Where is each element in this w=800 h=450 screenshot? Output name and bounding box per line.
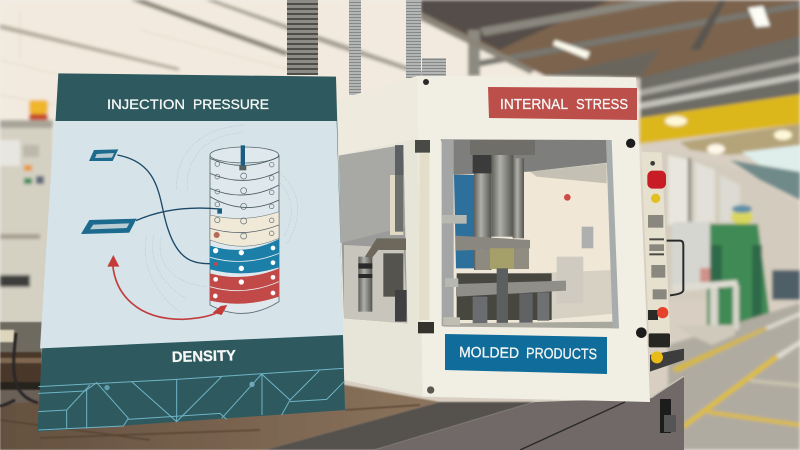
wall pipes xyxy=(0,24,180,71)
control strip xyxy=(641,152,671,347)
lights xyxy=(748,6,770,27)
cream layers xyxy=(210,212,279,246)
skylight xyxy=(742,145,800,172)
table xyxy=(672,280,738,292)
side window xyxy=(339,145,407,323)
wood table surface xyxy=(0,333,535,450)
wall column xyxy=(468,30,480,76)
hinges and bolts xyxy=(415,140,430,153)
left bench under control box xyxy=(0,322,42,405)
upper plate xyxy=(455,236,530,251)
grey cabinet xyxy=(672,222,710,288)
far wall xyxy=(664,150,800,300)
layer dots xyxy=(215,162,274,239)
sensor icons xyxy=(81,149,137,234)
label: internal stress: INTERNAL xyxy=(500,97,568,113)
connecting curves xyxy=(117,155,219,264)
lower plate and pins xyxy=(457,273,552,320)
diagram panel xyxy=(40,121,343,348)
dotted halos xyxy=(145,125,298,312)
label: internal stress xyxy=(488,87,637,120)
green machine xyxy=(707,224,770,328)
left control box xyxy=(0,120,53,325)
red layers xyxy=(210,268,279,304)
yellow beam xyxy=(639,94,800,144)
heading: injection pressure xyxy=(107,96,269,112)
window frame trim right xyxy=(606,140,619,328)
heading: density: DENSITY xyxy=(172,347,236,366)
label: molded products xyxy=(445,334,607,374)
label: internal stress: STRESS xyxy=(576,97,628,113)
brick lines xyxy=(0,10,290,105)
blue layers xyxy=(210,239,279,273)
heading: injection pressure: PRESSURE xyxy=(193,96,269,112)
plunger xyxy=(241,145,245,166)
columns xyxy=(474,157,491,270)
side body xyxy=(337,76,423,397)
machine base cabinet xyxy=(375,375,684,450)
red arrow xyxy=(107,255,227,319)
heading: injection pressure: INJECTION xyxy=(107,96,185,112)
ceiling xyxy=(420,0,800,122)
interior: ceiling and door xyxy=(441,139,612,175)
circuit pattern xyxy=(38,368,344,430)
cylinder diagram xyxy=(210,145,279,313)
handle xyxy=(667,241,683,295)
front frame xyxy=(417,76,650,402)
floor xyxy=(668,303,800,450)
label: molded products: MOLDED xyxy=(459,345,519,362)
left strip xyxy=(419,153,429,320)
press machine xyxy=(337,76,684,402)
hose and threaded rods xyxy=(287,0,446,95)
ledge and yellow knob xyxy=(650,349,684,372)
beacon xyxy=(29,100,48,114)
front window xyxy=(441,139,619,328)
board: injection pressure and density poster xyxy=(37,73,345,432)
label: molded products: PRODUCTS xyxy=(526,346,597,363)
